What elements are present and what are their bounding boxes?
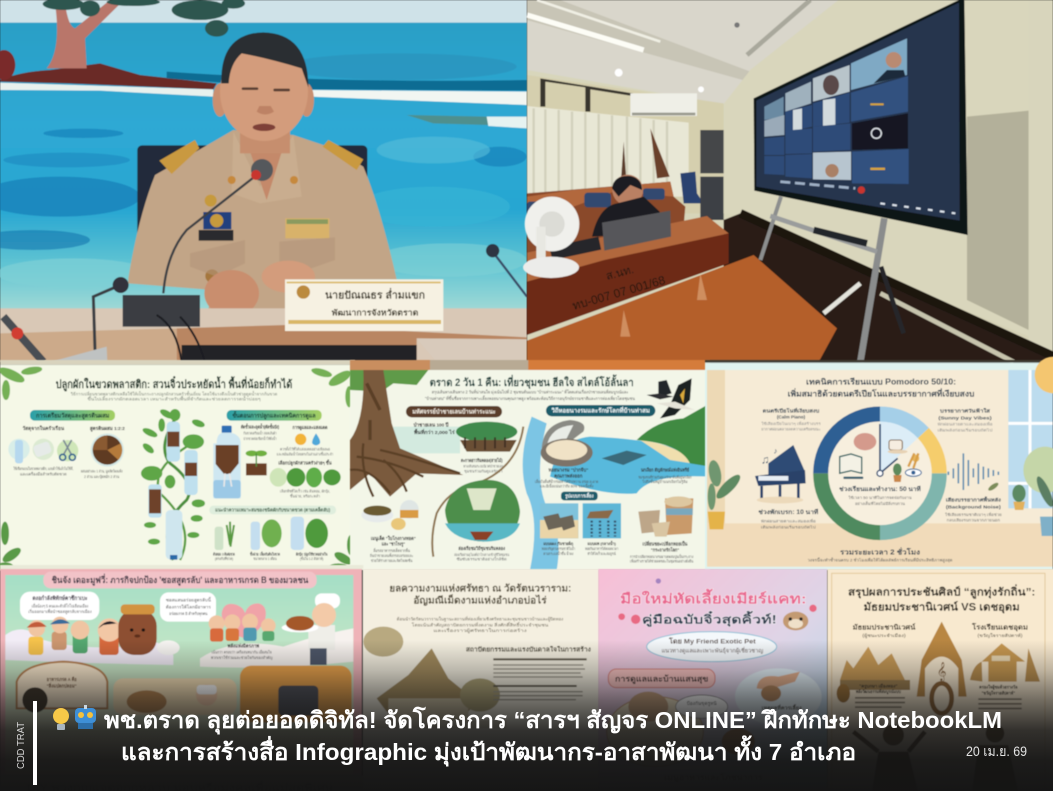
shore (640, 440, 692, 463)
infographic: Trat 2 days 1 night community tourism (350, 360, 710, 570)
stat text: พื้นที่กว่า 2,000 ไร่ (414, 427, 455, 436)
title (848, 584, 1035, 615)
recycled oyster shell pottery (630, 496, 694, 564)
calm piano note: ใช้เสียงเปียโนเบาๆ เพื่อสร้างบรร (761, 421, 821, 426)
sunny day note: เติมพลังก่อนเริ่มรอบถัดไป (937, 427, 993, 432)
author cloud: แนวทางดูแลและเพาะพันธุ์จากผู้เชี่ยวชาญ (661, 646, 763, 654)
total time footer (807, 546, 953, 563)
food court panels: อาหารเกรด A คือ (47, 676, 77, 683)
friendship heart and kids: พลังแห่งมิตรภาพ (227, 643, 260, 650)
food and herbal tea: ช่วยให้ร่างกายและจิตใจสดชื่น (371, 558, 413, 563)
hearts (618, 578, 817, 624)
step notes: ขึ้นฉ่าย, หรือกะหล่ำ (290, 494, 320, 499)
header ribbon (43, 572, 317, 588)
subtitle: ขึ้นไปเลี้ยงรากผักตลอดเวลา เหมาะสำหรับพื้นที่จำกัดและช่วยลดการรดน้ำบ่อยๆ (87, 396, 261, 402)
hornbill birds (647, 378, 695, 418)
uniform (128, 130, 397, 315)
oyster notes: เลี้ยงในพื้นที่น้ำกร่อยทำให้มีรสหวาน อร่อย สะอาด (535, 479, 599, 484)
intro: โดยเน้นสำคัญสถาปัตยกรรมที่งดงาม สิ่งศักดิ์สิทธิ์ประจำชุมชน (412, 621, 548, 628)
comparison strip: bottle size per vegetable: ขึ้นฉ่าย: เลี้ยงกับต้นในขวด (250, 550, 280, 556)
title: ยลความงามแห่งศรัทธา ณ วัดรัตนวราราม: (389, 583, 571, 595)
infographic: Pomodoro 50/10 technique (705, 357, 1053, 570)
mangrove clump (456, 422, 517, 474)
boat through mangrove tunnel: ซึมซับธรรมชาติอย่างใกล้ชิด (456, 557, 507, 562)
hand petting meerkat cloud (735, 668, 822, 725)
soil mix pie: 2 ส่วน และปุ๋ยหมัก 2 ส่วน (84, 474, 119, 480)
intro: และเรื่องราวผู้ศรัทธาในการก่อสร้าง (433, 627, 527, 634)
infographic: Crayon Shin-chan style food story (0, 565, 363, 791)
comparison strip: bottle size per vegetable: ผักบุ้ง: ปลูกใช้ขวดอย่างใน (296, 550, 328, 557)
school right: (ขวัญใจรายสัปดาห์) (977, 633, 1023, 638)
title: มือใหม่หัดเลี้ยงเมียร์แคท: (620, 588, 807, 606)
intro: ต้อนนำวัดรัตนวรารามในฐานะสถานที่ท่องเที่ยวเชิงศรัทธาและชุมชนชาวบ้านและผู้ปิดทอง (397, 615, 563, 622)
pomodoro donut clock: อย่างเต็มที่โดยไม่มีสิ่งรบกวน (855, 500, 906, 506)
step notes: เลือกปลูกผักสวนครัวง่ายๆ ขึ้น (278, 459, 332, 467)
step notes: ก้นขวดเตรียมน้ำ สอดเส้นผ้า (243, 430, 277, 435)
comparison strip: bottle size per vegetable: แนะนำความเหมาะสมของชนิดผักกับขนาดขวด (ตามเคล็ดลับ) (215, 506, 331, 513)
pomodoro donut clock: ใช้เวลา 50 นาทีในการจดจ่อกับงาน (848, 495, 912, 500)
central golden arch with treble clef: 𝄞 (937, 662, 947, 682)
headline: พช.ตราด ลุยต่อยอดดิจิทัล! จัดโครงการ “สารฯ สัญจร ONLINE” ฝึกทักษะ NotebookLM (104, 706, 1002, 735)
subtitle: สรุปเส้นทางเดินทาง 2 วันที่น่าสนใจ มุ่งเน้นไปที่ 2 ชุมชนต้นแบบ "บ้านท่าระแนะ" ที่โดดเด่นเรื่องป่าชายเลนที่สมบูรณ์และ (432, 389, 628, 396)
microphones (163, 175, 257, 293)
meerkat face (783, 612, 808, 630)
speech bubble left: เมื่อน้องๆ 5 คนและตัวฮีโร่ไปเยือนเมือง (32, 602, 88, 608)
photo: governor speaking in front of sea backdrop (0, 0, 527, 362)
break note: ช่วงพักเบรก: 10 นาที (758, 508, 818, 516)
calm piano note: ดนตรีเปียโนที่เงียบสงบ (763, 407, 819, 413)
farming methods: ตามกระแสน้ำขึ้น น้ำลง (543, 551, 574, 556)
front wooden table (527, 255, 837, 362)
farming methods: ทำให้โตเร็วและสมบูรณ์ (587, 550, 616, 556)
name plate: นายปัณณธร ล่ำมแขก (325, 287, 425, 301)
soil mix pie (81, 425, 125, 480)
speech bubble right: อร่อยเกรด B สำหรับทุกคน (169, 611, 208, 617)
results text left (837, 683, 905, 708)
eye icon (905, 469, 921, 476)
title: อัญมณีเม็ดงามแห่งอำเภอบ่อไร่ (413, 594, 547, 607)
subtitle: วิธีการเปลี่ยนขวดพลาสติกเหลือใช้ให้เป็นกระถางปลูกผักสวนครัวชั้นเยี่ยม โดยใช้แรงดึงเป็นตัวช่วยดูดน้ำจากก้นขวด (70, 389, 278, 397)
oyster raft (602, 451, 647, 465)
icon: robot (75, 705, 96, 729)
pomodoro donut clock (821, 414, 939, 533)
heading pill: materials: การเตรียมวัสดุและสูตรดินผสม (36, 411, 109, 420)
head (240, 113, 290, 153)
title (389, 583, 571, 607)
school right (970, 623, 1040, 682)
farming methods: รูปแบบการเลี้ยง (565, 492, 594, 500)
comparison strip: bottle size per vegetable: (ชั้นใน 1-2 สัปดาห์) (300, 556, 323, 561)
school left: (ผู้ชนะประจำเมือง) (862, 633, 906, 639)
sunny day note: (Sunny Day Vibes) (938, 415, 992, 420)
heading pill: steps: ขั้นตอนการปลูกและเทคนิคการดูแล (232, 409, 316, 420)
infographic: Wat Rattanawararam temple (363, 569, 599, 791)
subtitle (425, 389, 635, 402)
photo: online training room with large video conference screen: ส.นท. (605, 264, 635, 283)
headline: และการสร้างสื่อ Infographic มุ่งเป้าพัฒนากร-อาสาพัฒนา ทั้ง 7 อำเภอ (121, 735, 856, 767)
background noise note: (Background Noise) (946, 505, 1001, 510)
friendship heart and kids: เน้นกว่า ครอบว่า เครือสนทนากัน เมื่อสนใจ (212, 650, 272, 655)
plant right (1034, 475, 1053, 536)
background tree on rock island (0, 0, 245, 89)
photo: online training room with large video conference screen (523, 0, 1053, 362)
self watering bottle diagram (213, 426, 241, 498)
farming methods (540, 492, 621, 556)
conductor figure silhouette (853, 724, 1018, 791)
smiling sauce jar (118, 604, 157, 655)
chef holding plate (282, 593, 340, 665)
water ribbon (523, 417, 559, 570)
intro (397, 615, 563, 634)
results text left: "ครูบกษา เมืองทอง" (859, 683, 897, 689)
brain icon (854, 433, 876, 450)
recycled oyster shell pottery: เพื่อสร้างรายได้ช่วยลดขยะในชุมชนอย่างยั่งยืน (630, 558, 694, 564)
temple illustration (363, 627, 507, 728)
food heading: เมนูอาหารและโภชนาการ (664, 772, 763, 783)
total time footer: รวมระยะเวลา 2 ชั่วโมง (840, 546, 921, 556)
farming methods: แบบแพ (กลางน้ำ) (587, 539, 616, 546)
subtitle (70, 389, 278, 402)
heading pill: mangrove forest: มหัศจรรย์ป่าชายเลนบ้านท่าระแนะ (412, 408, 496, 416)
section pill: care and home (608, 669, 715, 688)
plant left (707, 459, 743, 529)
comparison strip: bottle size per vegetable: (ตรงกับที่ขวด) (215, 556, 233, 561)
school right: โรงเรียนเดชอุดม (971, 623, 1028, 632)
materials icons (8, 425, 78, 477)
clock hands (877, 424, 882, 473)
comparison strip: bottle size per vegetable: ขนาดกลาง 1 เดือน (253, 556, 277, 561)
food and herbal tea: เมนูเด็ด "ใบโกงกางทอด" (371, 534, 416, 542)
boat through mangrove tunnel: ล่องเรือผ่านอุโมงค์ป่าโกงกางเข้าสู่ชีวิตชุมชน (454, 552, 510, 558)
heading pill: oyster farming: วิถีหอยนางรมและรักษ์โลกที่บ้านท่าสม (551, 406, 650, 415)
mangrove clump: ทางเดินชมระบบนิเวศป่าชายเลน (463, 464, 504, 469)
boat through mangrove tunnel (445, 480, 520, 562)
title: คู่มือฉบับจิ๋วสุดคิ้วท์! (642, 610, 777, 628)
materials icons: และเครื่องมือสำหรับตัดขวด (20, 472, 67, 477)
break note: พักผ่อนสายตาและสมองเพื่อ (761, 518, 816, 523)
table (0, 308, 527, 362)
meerkat in a burrow: ป้องกันขุดรูหนี (687, 700, 717, 707)
background noise note: ใช้เสียงธรรมชาติเบาๆ เพื่อช่วย (945, 512, 1002, 517)
brand label: CDD TRAT (16, 722, 27, 769)
central golden arch with treble clef (917, 622, 967, 713)
title: ตราด 2 วัน 1 คืน: เที่ยวชุมชน ฮีลใจ สไตล์โอ้ลั้นลา (430, 374, 634, 390)
infographic: Look Thung art contest summary (827, 569, 1053, 791)
hand petting meerkat cloud: เหตุผลที่ควรเลี้ยง (762, 702, 802, 711)
oyster notes: หอยนางรม "ปากจีบ" (548, 467, 588, 473)
mangrove tree (350, 370, 463, 497)
forest headland (637, 403, 710, 467)
food and herbal tea: และ "ชาโรงรู" (382, 540, 405, 547)
results text left: พลังวัฒนธรรมที่สมบูรณ์แบบ (856, 688, 901, 695)
coffee cup icon (889, 440, 902, 450)
meerkat in a burrow (607, 692, 728, 767)
results text right (978, 683, 1022, 709)
architecture section (466, 645, 591, 700)
background noise note: เสียงบรรยากาศพื้นหลัง (946, 496, 1002, 503)
badges and ribbons (203, 212, 231, 229)
oyster (541, 420, 593, 467)
recycled oyster shell pottery: "กระถางรักโลก" (651, 547, 679, 553)
mangrove clump: ชุมชนร่วมกันดูแลรักษา (464, 468, 502, 474)
icon: light bulb (53, 708, 69, 730)
step notes: ปากขวดต่อเชือกน้ำให้ดิ่งน้ำ (243, 436, 277, 441)
results text right: "ขวัญใจรายสัปดาห์" (982, 689, 1015, 696)
step notes: ควรตั้งไว้ที่ได้แสงแดดอย่างเพียงพอ (280, 447, 330, 452)
electric fan (523, 197, 579, 278)
header ribbon: ชินจัง เดอะมูฟวี่: ภารกิจปกป้อง 'ซอสสูตรลับ' และอาหารเกรด B ของมวลชน (52, 573, 309, 586)
food and herbal tea (361, 500, 419, 563)
friendship heart and kids (209, 603, 276, 660)
infographic: meerkat care guide (598, 569, 827, 791)
background noise waveform (948, 453, 1000, 492)
break note: เติมพลังก่อนเริ่มรอบถัดไป (761, 524, 817, 529)
step notes: และหมั่นเติมน้ำโดยตรงในส่วนล่างขึ้นประจำ (277, 452, 333, 457)
food and herbal tea: ถิ่นป่าชายเลนทั้งกรอบอร่อยและ (369, 553, 413, 558)
sunny day note: บรรยากาศวันฟ้าใส (940, 407, 990, 413)
heading pill: oyster farming (546, 405, 655, 416)
window with sun (1008, 357, 1053, 510)
back seats (527, 182, 685, 253)
screen stand with keyboard (760, 197, 904, 362)
focus time text: ช่วงเรียนและทำงาน: 50 นาที (839, 485, 921, 493)
friendship heart and kids: พวกเขาใช้ร่วมและช่วยใจกันของสำคัญ (211, 655, 273, 660)
large video conference screen (754, 0, 968, 235)
speech bubble left: ดงอกำลังพิทักษ์คาซึกาเบะ (32, 594, 87, 602)
school left (840, 623, 916, 690)
grand piano (755, 445, 806, 503)
white dog (157, 640, 180, 655)
stat text (413, 422, 455, 436)
step notes: เลือกพืชที่โตเร็ว เช่น ต้นหอม, ผักบุ้ง, (280, 488, 330, 495)
corner foliage (0, 365, 354, 570)
author cloud: โดย My Friend Exotic Pet (668, 637, 757, 646)
subtitle: "บ้านท่าสม" ที่ขึ้นชื่อจากการเพาะเลี้ยงหอยนางรมคุณภาพสูง พร้อมสะท้อนวิถีการอนุรักษ์ธรรมชาติและการท่องเที่ยวโดยชุมชน (425, 395, 635, 402)
calm piano note: (Calm Piano) (777, 414, 806, 419)
materials icons: วัสดุจากในครัวเรือน (22, 425, 65, 432)
farming methods: หอยเจริญตามธรรมชาติในน้ำ (542, 546, 575, 551)
title (620, 588, 807, 628)
comparison strip: bottle size per vegetable (209, 506, 336, 561)
floor and baseboard (724, 213, 1053, 362)
soil mix pie: สูตรดินผสม 1:2:2 (90, 425, 125, 433)
architecture section: สถาปัตยกรรมและแรงบันดาลใจในการสร้าง (466, 645, 591, 654)
background noise note (945, 496, 1002, 523)
step notes (241, 423, 341, 499)
author cloud (647, 632, 777, 662)
food court panels: "สิ่งแปลกปลอม" (47, 682, 77, 690)
oyster notes (535, 467, 692, 488)
results text right: ครองใจผู้ชมด้วยรางวัล (979, 683, 1018, 690)
title: ปลูกผักในขวดพลาสติก: สวนจิ๋วประหยัดน้ำ พื้นที่น้อยก็ทำได้ (56, 375, 292, 392)
cloud band (5, 629, 173, 665)
heading pill: materials (30, 410, 115, 421)
materials icons: ใช้เชือกแบนในขวดพลาสติก, แถบผ้าใช้แล้วไม่ใช้ดี, (13, 466, 73, 471)
heading pill: steps (227, 409, 322, 421)
curtains (527, 106, 689, 197)
name plate: พัฒนาการจังหวัดตราด (331, 307, 418, 317)
section pill: care and home: การดูแลและบ้านแสนสุข (615, 674, 708, 685)
speech bubble left (20, 592, 99, 620)
central bottle vine (141, 407, 206, 560)
oyster notes: ชมชุมชนที่ร่วมกันดูแลรักษาถิ่นที่อยู่นกเงือก (638, 474, 692, 480)
middle desk (527, 216, 729, 287)
kids group left (27, 617, 121, 655)
soil mix pie: ผสมอย่างละ 1 ส่วน, มูลสัตว์ผงแห้ง (81, 469, 123, 475)
speech bubble left: เริ่มออกมาเพื่อนำซอสสูตรลับจากเมือง (28, 608, 92, 615)
sunny day note (937, 407, 993, 432)
caption block (16, 701, 1027, 785)
comparison strip: bottle size per vegetable: ต้นหอม: 3 ต้นต่อขวด (213, 551, 235, 556)
chair (137, 145, 367, 259)
oyster notes: และมีเนื้อแน่นกว่าถึง 80% ของเนื้อทั้ง (540, 483, 594, 488)
title: สรุปผลการประชันศิลป์ “ลูกทุ่งรักถิ่น”: (848, 584, 1035, 600)
grand piano: ♪ (773, 446, 777, 455)
speech bubble right: ต้องการให้โลกมีอาหาร (166, 603, 212, 609)
stat text: ป่าชายเลน 100 ปี (413, 422, 448, 429)
school left: มัธยมประชานิเวศน์ (853, 623, 916, 632)
oyster notes: นกเงือก สัญลักษณ์แห่งอินทรีย์ (641, 467, 689, 474)
pot plant icon (893, 475, 902, 482)
step notes: การดูแลและแสงแดด (292, 425, 327, 431)
title: เทคนิคการเรียนแบบ Pomodoro 50/10: (806, 377, 956, 387)
speech bubble right (160, 592, 216, 622)
dark gradient caption band (0, 640, 1053, 791)
farming methods: หอยกินอาหารได้ตลอดเวลา (585, 546, 618, 551)
infographic: plastic bottle vegetable garden (0, 360, 355, 571)
speech bubble right: ซอสแสนอร่อยสูตรลับนี้ (166, 597, 212, 604)
book icon (840, 454, 862, 473)
background noise note: กลบเสียงรบกวนจากภายนอก (947, 518, 1000, 523)
title: เพิ่มสมาธิด้วยดนตรีเปียโนและบรรยากาศที่เงียบสงบ (788, 388, 974, 399)
oyster notes: คุณภาพส่งออก (554, 473, 583, 479)
farming methods: แบบแผง (ริมชายฝั่ง) (543, 540, 574, 546)
calm piano note (761, 407, 821, 432)
epaulettes (159, 140, 199, 174)
mangrove clump: ตะกาดยาวริมคลอง(สายไม้) (461, 457, 503, 463)
seated participant (612, 175, 643, 205)
name plate (285, 279, 443, 331)
total time footer: วงจรนี้จะทำซ้ำจนครบ 2 ชั่วโมงเพื่อให้ได้ผลลัพธ์การเรียนที่มีประสิทธิภาพสูงสุด (807, 555, 953, 563)
photo: online training room with large video conference screen: ทบ-007 07 001/68 (571, 273, 667, 313)
date: 20 เม.ย. 69 (966, 743, 1027, 759)
stretching person icon (912, 455, 919, 462)
boat through mangrove tunnel: ล่องเรือชมวิถีชุมชนริมคลอง (458, 545, 506, 552)
hands (204, 270, 259, 317)
recycled oyster shell pottery: การนำเปลือกหอยนางรมมาบดผสมปูนเป็นกระถาง (630, 553, 693, 559)
right wall (724, 0, 1053, 347)
vertical accent bar (33, 701, 37, 785)
break note (758, 508, 818, 529)
title (788, 377, 974, 399)
title: มัธยมประชานิเวศน์ VS เดชอุดม (864, 601, 1020, 615)
oyster notes: ไปถึงขั้นหมู่บ้านนกเงือกไม่รู้ลืม (642, 479, 688, 484)
recycled oyster shell pottery: เปลี่ยนขยะเปลือกหอยเป็น (642, 540, 688, 547)
calm piano note: ยากาศผ่อนคลายลดความเครียดขณะ (761, 427, 821, 432)
food court panels (17, 662, 352, 722)
food and herbal tea: ลิ้มรสอาหารรสเด็ดจากพื้น (373, 547, 410, 553)
step notes: ตัดขั้วและอุดน้ำ(ตัดขั้นบัง) (241, 423, 279, 431)
headline (104, 706, 1002, 767)
heading pill: mangrove forest (406, 406, 502, 417)
grand piano: ♫ (761, 454, 769, 466)
sunny day note: พักผ่อนสายตาและสมองเพื่อ (937, 422, 992, 427)
